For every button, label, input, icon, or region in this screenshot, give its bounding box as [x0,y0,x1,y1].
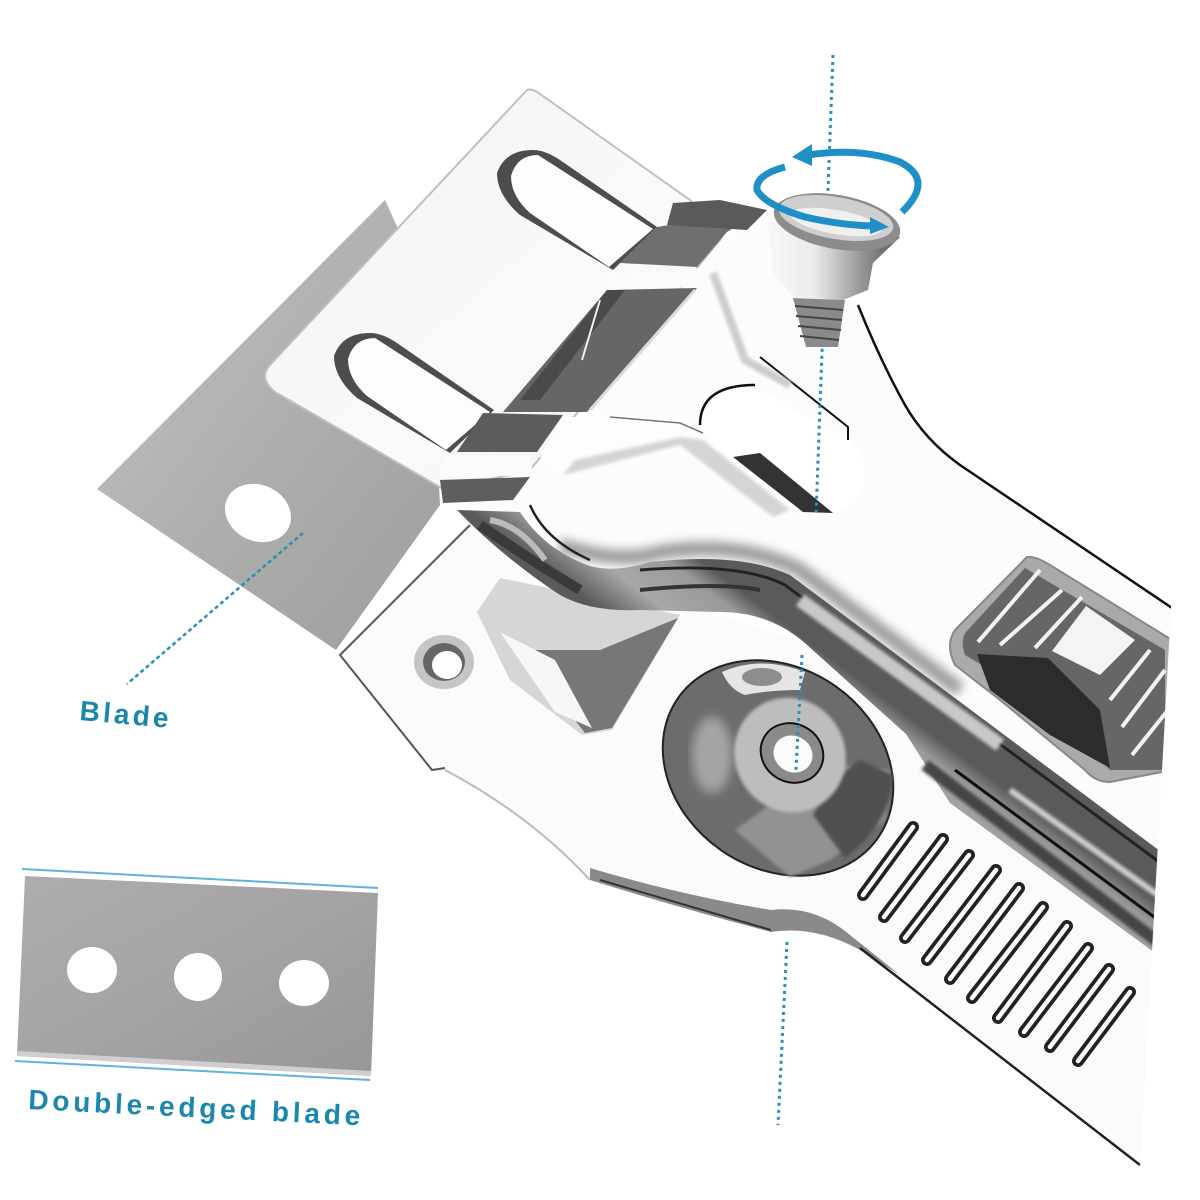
bottom axis line [778,942,787,1125]
hole: middle [174,953,222,1001]
handle outer edge [858,305,1172,608]
middle axis line [796,655,802,770]
upper handle [457,215,1172,958]
adjustment slot [699,386,866,515]
rotation arrow [757,144,918,234]
blade hole [215,473,301,553]
label: Double-edged blade: Double-edged blade [28,1084,365,1131]
right edge mask [1120,590,1200,1200]
label: Blade: Blade [78,695,173,734]
blade leader line [127,533,303,684]
lower scraper body [340,525,1172,1170]
top axis line [816,55,833,515]
lower rim [590,868,900,975]
rivet [414,635,474,689]
upper bent tab [540,417,790,517]
handle steel band [457,510,1172,958]
hole: right [279,960,329,1006]
thumb wheel [950,557,1172,782]
ribbed grip slots [863,827,1130,1061]
hole: left [67,947,117,993]
wing nut base [621,616,935,920]
upper slot [497,150,657,270]
right arm edge [760,357,848,440]
single-edged blade [97,200,440,650]
raised lower hinge [477,578,680,735]
clamp bevel [620,210,763,267]
screw [768,184,905,347]
handle band shadow [560,545,960,690]
clamp top plate [265,90,790,560]
lower slot [334,333,494,453]
double-edged blade [15,869,378,1080]
